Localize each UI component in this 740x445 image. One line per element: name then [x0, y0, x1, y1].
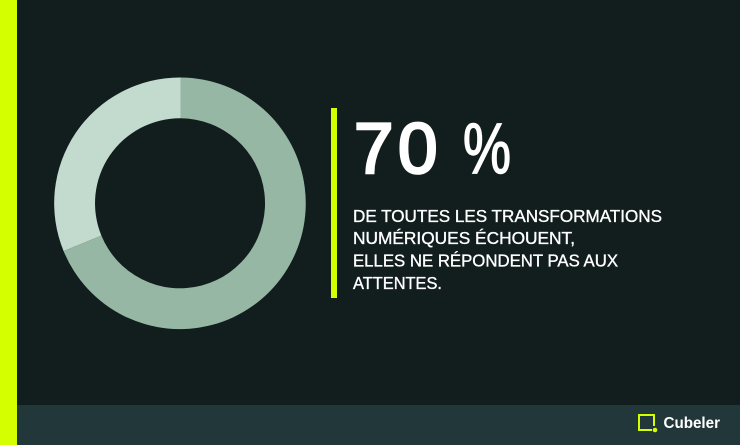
description text: [353, 206, 662, 293]
big number: 0: [398, 110, 438, 189]
description text: DE TOUTES LES TRANSFORMATIONS: [353, 206, 662, 226]
description text: NUMÉRIQUES ÉCHOUENT,: [353, 228, 575, 248]
big number: 7: [354, 110, 394, 189]
segment: remaining 30 percent: [54, 77, 180, 251]
accent strip: [0, 0, 17, 445]
logo icon: [639, 415, 657, 432]
vertical accent bar: [331, 108, 337, 298]
segment: 70 percent: [64, 78, 306, 329]
big number: %: [463, 110, 511, 189]
Cubeler logo: [639, 415, 720, 432]
logo wordmark: Cubeler: [664, 415, 720, 432]
description text: ATTENTES.: [353, 273, 442, 293]
donut chart: 70 percent: [54, 77, 306, 329]
footer band: [17, 405, 740, 445]
description text: ELLES NE RÉPONDENT PAS AUX: [353, 250, 618, 270]
